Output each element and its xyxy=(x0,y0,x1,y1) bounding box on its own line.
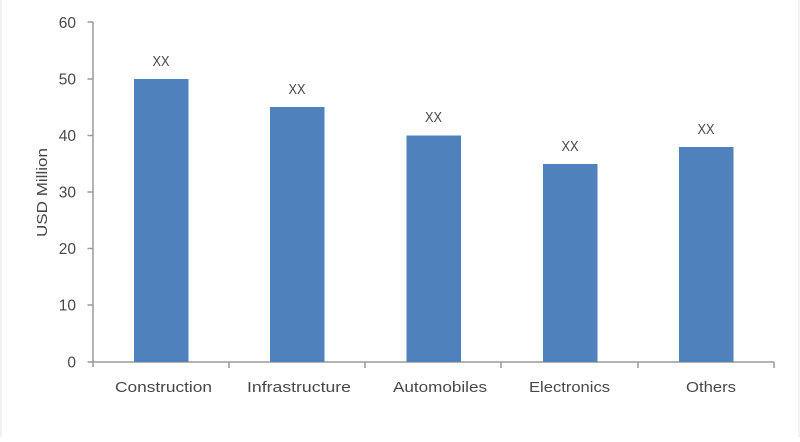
y axis: 50 xyxy=(59,72,76,88)
x axis xyxy=(93,362,774,396)
y axis: 10 xyxy=(59,298,76,314)
data labels: XX xyxy=(425,109,442,126)
y axis title: USD Million xyxy=(34,148,51,237)
y axis: 20 xyxy=(59,241,76,258)
data labels: XX xyxy=(288,81,306,98)
y axis xyxy=(59,15,93,372)
data labels: XX xyxy=(698,121,714,138)
x axis: Electronics xyxy=(529,379,610,396)
y axis: 40 xyxy=(59,128,76,145)
data labels: XX xyxy=(152,53,170,70)
y axis: 30 xyxy=(59,184,76,202)
x axis: Others xyxy=(686,379,736,396)
x axis: Construction xyxy=(115,379,212,396)
y axis: 60 xyxy=(59,15,76,32)
x axis: Automobiles xyxy=(393,379,487,396)
bars xyxy=(134,79,734,362)
y axis: 0 xyxy=(67,354,76,372)
data labels: XX xyxy=(562,138,578,155)
data labels xyxy=(152,53,714,155)
x axis: Infrastructure xyxy=(247,379,351,396)
